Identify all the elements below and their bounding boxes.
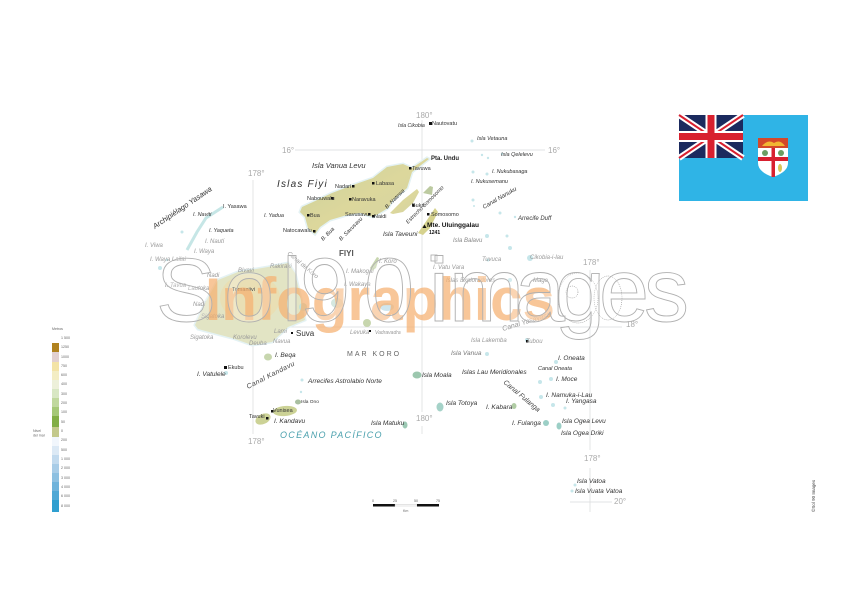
labels: Lau group: Islas Lau Meridionales [462, 369, 527, 376]
labels: southwest: Isla Matuku [371, 420, 405, 427]
labels: Vanua Levu region: Labasa [376, 181, 395, 187]
labels: Vanua Levu region: Tavuwa [412, 166, 432, 172]
labels: northeast: Arrecife Duff [517, 216, 553, 222]
labels: Vanua Levu region: Pta. Undu [431, 156, 459, 162]
labels: southwest: Vunisea [273, 408, 294, 414]
graticule labels [248, 111, 638, 506]
elevation legend [33, 327, 70, 512]
labels: Lau group: Tubou [526, 339, 543, 345]
graticule labels: 16° [548, 146, 560, 155]
labels: Viti Levu region: Canal de Koro [286, 251, 319, 281]
labels: southwest: Arrecifes Astrolabio Norte [307, 378, 382, 385]
graticule labels: 180° [416, 111, 433, 120]
flag: union jack [679, 115, 743, 158]
labels: Vanua Levu region: Naravuka [352, 197, 376, 203]
labels: Viti Levu region: FIYI [339, 249, 354, 258]
small islands [264, 257, 562, 430]
labels: Yasawa region: Archipiélago Yasawa [150, 184, 214, 231]
legend: values: 100 [61, 410, 67, 414]
labels: Lau group: Islas Exploradores [446, 278, 495, 284]
legend: values [61, 336, 70, 508]
labels: Lau group: Canal Yasayasa [502, 311, 552, 333]
labels: northeast: Isla Qelelevu [501, 152, 533, 158]
labels: Lau group: I. Namuka-i-Lau [546, 392, 593, 399]
labels: Lau group: Isla Lakemba [471, 338, 507, 344]
labels: northeast [471, 136, 553, 222]
labels: Vanua Levu region: Nautovatu [432, 121, 457, 127]
legend: values: 600 [61, 373, 67, 377]
labels: Lau group: I. Fulanga [512, 420, 541, 427]
scale bar: 75 [436, 499, 440, 503]
labels: Yasawa region: I. Naviti [193, 212, 212, 218]
legend: values: 750 [61, 364, 67, 368]
reefs: Yasawa chain [187, 207, 223, 250]
graticule labels: 178° [248, 437, 265, 446]
labels: Yasawa region: I. Yaqueta [209, 228, 234, 234]
labels: Viti Levu region: I. Koro [379, 259, 397, 265]
labels: Lau group: I. Kabara [486, 404, 513, 411]
labels: Vanua Levu region: Isla Vanua Levu [312, 161, 366, 170]
labels: Viti Levu region: Levuka [350, 330, 370, 336]
labels: Viti Levu region: Sigatoka [201, 314, 225, 320]
labels: northeast: I. Nukusemanu [471, 179, 508, 185]
labels: Viti Levu region: Deuba [249, 341, 267, 347]
labels: Lau group: I. Vatu Vara [433, 265, 465, 271]
legend: values: 8 000 [61, 504, 70, 508]
scale bar [372, 499, 440, 513]
legend: values: 6 000 [61, 494, 70, 498]
island: Kandavu [254, 405, 297, 427]
scale bar: 0 [372, 499, 374, 503]
labels: southwest: I. Vatulele [197, 371, 226, 378]
reefs and islets [158, 140, 576, 492]
dotted reef outlines [558, 273, 622, 323]
small square marker [431, 255, 437, 261]
labels: Viti Levu region: Lami [274, 329, 288, 335]
labels: Viti Levu region: Vadravadra [375, 330, 401, 336]
legend: colour ramp [52, 343, 59, 512]
legend: values: 200 [61, 438, 67, 442]
copyright note: ©Sol 90 Images [810, 479, 816, 512]
labels: southwest [197, 352, 452, 440]
watermark: outline text: Sol90images [156, 241, 689, 341]
labels: Vanua Levu region: Isla Cikobia [398, 123, 425, 129]
labels: Vanua Levu region: Nadari [335, 184, 351, 190]
labels: Lau group: Isla Vatoa [577, 478, 606, 485]
labels: Vanua Levu region: Buka [412, 203, 425, 209]
graticule labels: 180° [416, 414, 433, 423]
island: Vanua Levu [300, 158, 429, 234]
island: Viti Levu [195, 263, 305, 345]
place markers [224, 122, 528, 420]
labels: Viti Levu region: I. Makogai [346, 269, 374, 275]
labels: Lau group: Canal Fulanga [502, 379, 541, 414]
labels: Lau group [433, 238, 623, 495]
labels: southwest: Isla Ono [301, 399, 319, 405]
legend: values: 400 [61, 382, 67, 386]
labels: Viti Levu region: Nadi [193, 302, 206, 308]
labels: Lau group: Isla Vuata Vatoa [575, 488, 623, 495]
labels: Vanua Levu region: Savusavu [345, 212, 369, 218]
labels: Yasawa region: I. Nautí [205, 239, 226, 245]
labels: Lau group: Isla Totoya [446, 400, 478, 407]
labels: Yasawa region: I. Yasawa [223, 204, 248, 210]
labels: Vanua Levu region: Naidi [374, 214, 387, 220]
legend: values: 500 [61, 448, 67, 452]
labels: southwest: I. Kandavu [274, 418, 305, 425]
graticule lines [253, 120, 622, 512]
flag of Fiji [679, 115, 808, 201]
labels: Viti Levu region: Korolevu [233, 335, 257, 341]
labels: southwest: OCÉANO PACÍFICO [280, 430, 383, 440]
labels: Vanua Levu region: 1241 [429, 230, 440, 236]
labels: Lau group: Isla Vanua [451, 350, 482, 357]
legend: values: 1000 [61, 355, 69, 359]
labels: Vanua Levu region [264, 121, 479, 242]
legend: values: 1 000 [61, 457, 70, 461]
flag: shield [758, 138, 788, 177]
labels: Vanua Levu region: Estrecho Somosomo [405, 185, 446, 225]
labels: Lau group: Cikobia-i-lau [530, 255, 564, 261]
island: Rabi [423, 186, 433, 195]
labels: Vanua Levu region: Bua [310, 213, 321, 219]
labels: Viti Levu region: Lautoka [188, 286, 210, 292]
labels: Lau group: Isla Ogea Levu [562, 418, 606, 425]
legend: values: 2 000 [61, 466, 70, 470]
labels: Vanua Levu region: Somosomo [431, 212, 459, 218]
labels: Lau group: Tuvuca [482, 257, 502, 263]
graticule labels: 178° [583, 258, 600, 267]
graticule labels: 20° [614, 497, 626, 506]
labels: Yasawa region: I. Viwa [145, 243, 164, 249]
graticule labels: 178° [248, 169, 265, 178]
labels: Vanua Levu region: Islas Fiyi [277, 179, 328, 190]
legend: values: 1 500 [61, 336, 70, 340]
scale bar: 25 [393, 499, 397, 503]
labels: Yasawa region: I. Waya [194, 249, 215, 255]
labels: Vanua Levu region: B. Savusavu [338, 216, 364, 242]
legend: title: Metros [52, 327, 63, 331]
labels: Vanua Levu region: I. Yadua [264, 213, 284, 219]
labels: Vanua Levu region: Mte. Uluinggalau [427, 222, 479, 229]
legend: values: 300 [61, 392, 67, 396]
labels: Viti Levu region: Navua [273, 339, 291, 345]
labels: Vanua Levu region: Nabouwalu [307, 196, 335, 202]
labels: northeast: Canal Nanuku [482, 186, 519, 211]
labels: Viti Levu region: Bivavi [238, 268, 255, 274]
labels: Lau group: I. Moce [556, 376, 578, 383]
labels: southwest: Isla Moala [422, 372, 452, 379]
labels: Viti Levu region: I. Wakaya [344, 282, 371, 288]
labels: Viti Levu region: Suva [296, 329, 315, 338]
graticule labels: 178° [584, 454, 601, 463]
labels: Lau group: I. Oneata [558, 355, 585, 362]
legend: values: 3 000 [61, 476, 70, 480]
labels: southwest: Canal Kandavu [246, 360, 296, 391]
labels: Vanua Levu region: Isla Taveuni [383, 231, 418, 238]
labels: southwest: Ekubu [228, 365, 244, 371]
legend: values: 200 [61, 401, 67, 405]
labels: southwest: Tavuki [249, 414, 265, 420]
scale bar: Km [403, 509, 408, 513]
legend: sea level: Nivel [33, 429, 41, 433]
legend: values: 50 [61, 420, 65, 424]
labels: Viti Levu region: Tomaniivi [232, 287, 255, 293]
labels: northeast: Isla Vetauna [477, 136, 507, 142]
legend: values: 1250 [61, 345, 69, 349]
labels: Vanua Levu region: B. Natewa [384, 188, 406, 210]
island: Natewa peninsula [390, 189, 419, 214]
labels: Lau group: I. Yangasa [566, 398, 597, 405]
island: Taveuni [418, 208, 438, 235]
labels: Yasawa region [145, 184, 248, 263]
labels: Lau group: Isla Ogea Driki [561, 430, 604, 437]
labels: Lau group: Isla Balavu [453, 238, 483, 244]
labels: Viti Levu region: I. Tavua [165, 283, 187, 289]
labels: northeast: I. Nukubasaga [492, 169, 527, 175]
labels: southwest: I. Beqa [275, 352, 296, 359]
labels: Yasawa region: I. Waya Lailai [150, 257, 187, 263]
legend: values: 4 000 [61, 485, 70, 489]
labels: Viti Levu region [165, 249, 401, 358]
labels: Vanua Levu region: Natocawalu [283, 228, 312, 234]
labels: Viti Levu region: Rakiraki [270, 264, 292, 270]
scale bar: 50 [414, 499, 418, 503]
graticule labels: 16° [282, 146, 294, 155]
watermark: orange text: Infographics [205, 266, 555, 333]
graticule labels: 18° [626, 320, 638, 329]
labels: Lau group: Mago [533, 278, 549, 284]
labels: Vanua Levu region: B. Bua [320, 226, 336, 242]
labels: Viti Levu region: Nadi [207, 273, 220, 279]
legend: sea level: del mar [33, 434, 46, 438]
labels: Viti Levu region: Sigatoka [190, 335, 214, 341]
labels: Viti Levu region: MAR KORO [347, 351, 401, 358]
labels: Lau group: Canal Oneata [538, 366, 572, 372]
legend: values: 0 [61, 429, 63, 433]
